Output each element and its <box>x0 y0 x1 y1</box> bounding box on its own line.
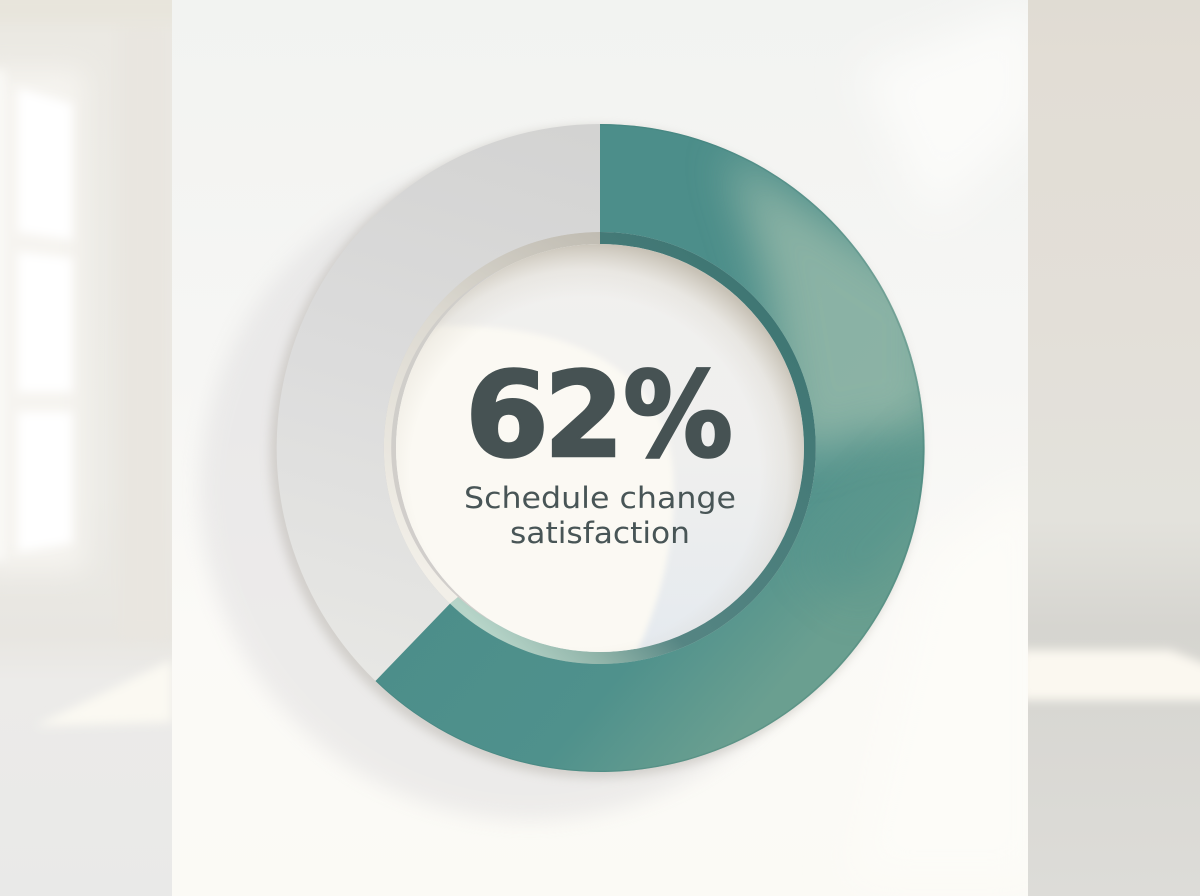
donut chart <box>276 124 950 772</box>
label: Schedule change satisfaction <box>464 481 736 550</box>
label: Schedule change satisfaction: satisfaction <box>510 516 690 550</box>
label: Schedule change satisfaction: Schedule change <box>464 481 736 515</box>
value: 62%: 6 <box>465 346 549 484</box>
segment: remaining 38% grey <box>277 124 600 681</box>
ring recess floor <box>380 244 804 665</box>
value: 62%: 2 <box>544 346 624 484</box>
light patch <box>725 150 935 465</box>
warm lit area <box>380 326 674 665</box>
shaded band <box>842 458 924 584</box>
contact shadow <box>270 126 922 778</box>
value: 62% <box>465 346 733 484</box>
wall cast shadow <box>202 198 728 818</box>
panel: left blurred room with window <box>0 0 172 722</box>
panel: central wall <box>172 0 1040 896</box>
panel: right blurred room <box>1020 0 1200 896</box>
rim shading <box>376 124 924 772</box>
ring inner wall: grey part <box>384 232 600 604</box>
soft rim shadow <box>396 244 804 652</box>
value: 62%: % <box>623 346 733 484</box>
ring inner wall: teal part <box>450 232 816 664</box>
window panes <box>18 91 72 550</box>
segment: 62% teal <box>376 124 925 772</box>
floor light patch <box>51 664 172 725</box>
floor light band <box>1020 650 1200 700</box>
